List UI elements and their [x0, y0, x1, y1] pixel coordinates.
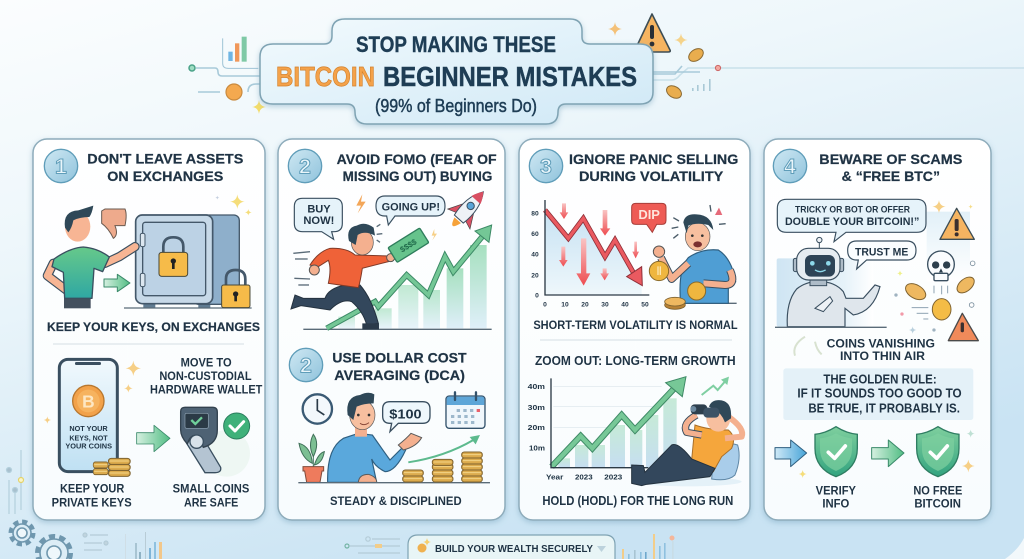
- shield captions: INFO: [822, 497, 849, 511]
- phone text: YOUR COINS: [65, 442, 112, 451]
- icon: gear small: [11, 522, 33, 544]
- axis labels: [528, 384, 622, 481]
- lower section: [775, 337, 975, 511]
- bottom left connectors: [83, 533, 108, 550]
- growth chart: [528, 377, 686, 481]
- shield no free: [917, 427, 959, 477]
- icon: coin right upper: [686, 46, 706, 64]
- axis labels: 10m: [529, 446, 545, 453]
- shield captions: BITCOIN: [914, 497, 961, 511]
- axis labels: 20: [581, 302, 589, 309]
- badge 3: [529, 149, 563, 183]
- axis labels: 10: [561, 302, 569, 309]
- panel: 1 exchanges: [33, 139, 265, 520]
- scams section: [773, 149, 978, 341]
- footer connectors: [345, 537, 400, 553]
- axis labels: 0: [543, 302, 547, 309]
- icon: falling coins: [903, 274, 977, 320]
- axis labels: 40m: [528, 384, 545, 391]
- icon: padlock: [222, 270, 250, 308]
- heading: DURING VOLATILITY: [579, 168, 724, 184]
- heading: & “FREE BTC”: [842, 168, 940, 184]
- icon: warning: [940, 208, 974, 239]
- icon: coin right lower: [664, 83, 684, 101]
- panel: 4 scams: [764, 139, 991, 520]
- badge 1: [44, 149, 78, 183]
- bottom left bar chart: [125, 532, 162, 559]
- header decorations: [189, 14, 1024, 114]
- title line 2 accent: BITCOIN: [276, 61, 375, 92]
- icon: rocket: [442, 182, 495, 236]
- heading: MISSING OUT) BUYING: [343, 168, 492, 184]
- icon: clock: [303, 394, 332, 424]
- sparkles: [894, 200, 975, 334]
- background haze: [927, 212, 970, 282]
- panel card: [764, 139, 991, 520]
- vanishing swirl: [794, 337, 822, 356]
- icon: small bars right: [692, 79, 711, 91]
- captions: PRIVATE KEYS: [52, 496, 132, 510]
- small arrow: [702, 377, 729, 395]
- badge 4: 4: [784, 155, 796, 179]
- shield verify: [815, 427, 857, 477]
- axis labels: 40: [621, 302, 629, 309]
- title line 1: STOP MAKING THESE: [356, 32, 556, 57]
- bubble: going up: GOING UP!: [382, 201, 440, 213]
- node red: [715, 65, 721, 71]
- phone text: [65, 424, 112, 451]
- icon: arrow: [597, 546, 606, 552]
- footer text: BUILD YOUR WEALTH SECURELY: [435, 543, 593, 555]
- icon: coin hanging: [649, 261, 669, 281]
- caption: COINS VANISHING: [827, 337, 935, 351]
- captions: ARE SAFE: [184, 496, 238, 510]
- person: [47, 206, 135, 308]
- fomo section: [288, 149, 497, 329]
- axis labels: 40: [531, 252, 539, 259]
- upper section: [44, 149, 252, 308]
- red down arrows: [559, 203, 639, 286]
- heading: USE DOLLAR COST: [332, 349, 467, 365]
- heading: [87, 150, 243, 184]
- heading: AVERAGING (DCA): [334, 367, 465, 383]
- bubble: buy now: BUY: [307, 203, 331, 215]
- panel card: [33, 139, 265, 520]
- caption: SHORT-TERM VOLATILITY IS NORMAL: [533, 318, 738, 332]
- icon: binoculars: [690, 404, 719, 418]
- axis labels: Year: [546, 474, 564, 481]
- shield captions: NO FREE: [913, 483, 962, 497]
- sparkles: [215, 194, 252, 216]
- icon: small spark: [432, 229, 437, 240]
- ground line: [124, 306, 252, 310]
- heading: BEWARE OF SCAMS: [819, 151, 962, 167]
- sparkles: [44, 361, 141, 424]
- heading: ON EXCHANGES: [107, 168, 223, 184]
- icon: hardware wallet: [181, 407, 250, 477]
- sparkle: [252, 100, 266, 114]
- bubble: $100: $100: [389, 406, 422, 421]
- bubble: $100: [383, 402, 430, 432]
- sparkle: [674, 34, 688, 46]
- icon: orange coin left: [226, 84, 242, 100]
- bottom right corner highlight: [1005, 538, 1024, 559]
- axis labels: 20m: [528, 425, 545, 432]
- footer right bars: [622, 534, 674, 559]
- icon: coin stacks: [403, 452, 482, 482]
- circuit lines: [196, 66, 1024, 92]
- badge 2: 2: [299, 155, 311, 179]
- heading: [332, 349, 467, 383]
- panel card: [278, 139, 505, 520]
- person: [328, 393, 422, 482]
- axis labels: 0: [535, 292, 539, 299]
- bubble: trust me: [848, 241, 916, 269]
- coin: B: [82, 391, 95, 411]
- title banner: [260, 19, 653, 124]
- divider: [53, 343, 244, 345]
- caption: KEEP YOUR KEYS, ON EXCHANGES: [47, 320, 260, 334]
- ground line: [775, 325, 887, 329]
- growth arrow: [408, 435, 480, 462]
- node: [189, 65, 195, 71]
- heading: [819, 151, 962, 184]
- move text: [150, 356, 263, 396]
- axis labels: 20: [531, 272, 539, 279]
- badge 2: [288, 149, 322, 183]
- badge 1: 1: [55, 155, 67, 179]
- heading: AVOID FOMO (FEAR OF: [337, 151, 497, 167]
- axis labels: 50: [641, 302, 649, 309]
- axis labels: 80: [531, 211, 539, 218]
- axis labels: 2023: [604, 474, 622, 481]
- heading: [569, 151, 738, 184]
- rising arrow: [327, 225, 492, 328]
- axis labels: 30m: [528, 405, 545, 412]
- divider: [540, 339, 732, 341]
- title plate: [260, 19, 653, 124]
- axis labels: 60: [531, 231, 539, 238]
- icon: small bar chart: [223, 37, 258, 68]
- panel: 3 volatility: [519, 139, 750, 520]
- panel: 2 fomo and dca: [278, 139, 505, 520]
- long term section: [528, 353, 742, 508]
- move text: NON-CUSTODIAL: [159, 369, 252, 383]
- subtitle: (99% of Beginners Do): [375, 96, 537, 116]
- axis labels: [531, 211, 649, 309]
- icon: check badge: [224, 413, 250, 439]
- caption: [827, 337, 935, 363]
- panel card: [519, 139, 750, 520]
- panic section: [529, 149, 738, 332]
- captions: SMALL COINS: [173, 482, 249, 496]
- captions: [52, 482, 249, 510]
- chart bars: [338, 245, 487, 328]
- badge 3: 3: [540, 155, 552, 179]
- heading: ZOOM OUT: LONG-TERM GROWTH: [535, 353, 736, 368]
- running person: [291, 224, 395, 329]
- golden rule: THE GOLDEN RULE:: [823, 372, 937, 386]
- badge 2: 2: [300, 354, 312, 378]
- ground line: [303, 327, 492, 331]
- background square: [777, 258, 873, 327]
- bubble: dip: DIP: [638, 207, 660, 222]
- icon: coin held: [688, 282, 706, 300]
- left circuit decoration: [6, 450, 24, 514]
- caption: INTO THIN AIR: [840, 349, 925, 363]
- bubble: offer: [777, 199, 926, 242]
- icon: lightning: [356, 194, 366, 213]
- icon: skull: [928, 251, 954, 281]
- icon: plant: [299, 434, 324, 482]
- arrow blue: [775, 440, 807, 467]
- footer pill: [408, 535, 615, 559]
- pill shape: [408, 535, 615, 559]
- badge 2: [289, 348, 323, 382]
- badge 4: [773, 149, 807, 183]
- icon: phone: [59, 359, 117, 472]
- icon: cash: [388, 228, 429, 262]
- arrow green: [872, 440, 904, 467]
- icon: coin stack: [93, 458, 130, 476]
- golden rule: IF IT SOUNDS TOO GOOD TO: [797, 387, 962, 401]
- shield captions: VERIFY: [816, 483, 856, 497]
- line chart falling: [531, 200, 649, 309]
- heading: DON'T LEAVE ASSETS: [87, 150, 243, 166]
- worried person: [653, 205, 737, 303]
- dca section: [289, 348, 490, 508]
- golden rule: [783, 368, 973, 420]
- icon: cash: $$$$: [398, 237, 419, 254]
- phone text: NOT YOUR: [69, 424, 108, 433]
- ground line: [298, 481, 490, 485]
- bubble: trust me: TRUST ME: [855, 247, 909, 259]
- icon: safe: [136, 215, 239, 308]
- shield captions: [816, 483, 962, 511]
- golden rule: BE TRUE, IT PROBABLY IS.: [808, 401, 960, 415]
- robot: [787, 237, 880, 327]
- bubble: buy now: NOW!: [303, 215, 334, 227]
- sparkles: [799, 430, 975, 478]
- bubble: dip: [632, 203, 666, 232]
- captions: KEEP YOUR: [60, 482, 125, 496]
- icon: warning 2: [948, 313, 978, 341]
- phone text: KEYS, NOT: [69, 433, 108, 442]
- bubble: offer: DOUBLE YOUR BITCOIN!”: [785, 216, 919, 228]
- reclining person: [632, 400, 742, 486]
- icon: warning triangle: [635, 14, 670, 52]
- caption: HOLD (HODL) FOR THE LONG RUN: [542, 494, 733, 508]
- icon: gear large: [38, 537, 70, 559]
- bubble: going up: [376, 196, 445, 225]
- move text: MOVE TO: [181, 356, 232, 370]
- icon: coin: [418, 538, 431, 552]
- axis labels: 2023: [575, 474, 593, 481]
- lower section: [44, 356, 263, 510]
- bubble: offer: TRICKY OR BOT OR OFFER: [795, 204, 910, 214]
- icon: calendar: [446, 392, 485, 428]
- arrow: [104, 274, 130, 292]
- heading: IGNORE PANIC SELLING: [569, 151, 738, 167]
- axis labels: 30: [601, 302, 609, 309]
- sparkle: [608, 22, 622, 36]
- bubble: buy now: [294, 198, 342, 239]
- move text: HARDWARE WALLET: [150, 382, 263, 396]
- caption: STEADY & DISCIPLINED: [330, 494, 462, 508]
- title line 2: BEGINNER MISTAKES: [383, 61, 637, 92]
- arrow: [137, 425, 170, 452]
- heading: [337, 151, 497, 184]
- icon: coin flat: [665, 297, 685, 309]
